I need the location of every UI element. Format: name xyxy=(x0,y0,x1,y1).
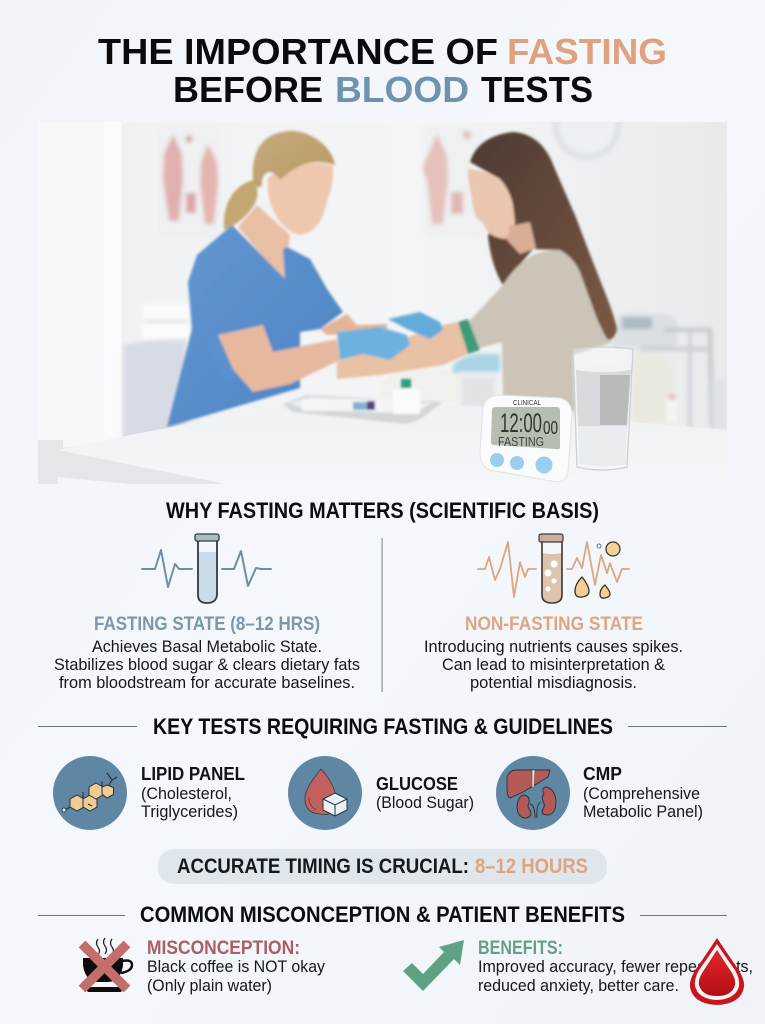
title: TESTS xyxy=(481,69,593,110)
panel: non-fasting state: Introducing nutrients causes spikes. xyxy=(424,637,683,656)
table xyxy=(58,422,727,484)
text: misconception: MISCONCEPTION: xyxy=(147,938,300,959)
text: benefits xyxy=(478,938,753,995)
timer xyxy=(480,395,572,482)
panel: non-fasting state: potential misdiagnosis. xyxy=(470,673,637,692)
panel: non-fasting state: Can lead to misinterpretation & xyxy=(442,655,666,674)
text: cmp xyxy=(583,764,703,821)
title xyxy=(98,31,667,110)
panel: fasting state xyxy=(54,614,360,692)
title: FASTING xyxy=(507,31,667,72)
text: misconception: Black coffee is NOT okay xyxy=(147,957,325,976)
icon: blood drop and sugar cube xyxy=(288,756,362,830)
text: cmp: CMP xyxy=(583,764,622,784)
icon: fasting test tube and steady pulse xyxy=(142,534,271,603)
photo: nurse drawing blood from patient with timer and water xyxy=(38,92,727,484)
title: THE IMPORTANCE OF xyxy=(98,31,498,72)
icon: lipid molecule xyxy=(53,756,127,830)
timer: FASTING xyxy=(498,434,544,449)
icon: red blood drop badge xyxy=(690,938,744,1005)
panel: fasting state: Achieves Basal Metabolic State. xyxy=(92,637,322,656)
nurse xyxy=(238,205,290,279)
panel: fasting state: from bloodstream for accurate baselines. xyxy=(59,673,355,692)
panel: fasting state: Stabilizes blood sugar & clears dietary fats xyxy=(54,655,360,674)
text: lipid panel: Triglycerides) xyxy=(141,802,238,821)
text: misconception xyxy=(147,938,325,995)
timer: CLINICAL xyxy=(513,400,541,407)
text: glucose: (Blood Sugar) xyxy=(376,793,474,812)
panel: non-fasting state: NON-FASTING STATE xyxy=(465,614,643,635)
timer: 00 xyxy=(543,418,558,438)
icon: check arrow xyxy=(403,940,464,991)
patient hair xyxy=(470,132,617,340)
glass of water xyxy=(573,347,633,470)
timer: 12:00 xyxy=(500,408,542,438)
icon: non-fasting test tube with spiking pulse and fats xyxy=(478,534,629,603)
title: BEFORE xyxy=(173,69,323,110)
callout: accurate timing: ACCURATE TIMING IS CRUCIAL: xyxy=(177,855,469,878)
text: misconception: (Only plain water) xyxy=(147,976,272,995)
icon: crossed-out coffee cup xyxy=(82,938,132,992)
text: cmp: Metabolic Panel) xyxy=(583,802,703,821)
text: benefits: reduced anxiety, better care. xyxy=(478,976,679,995)
heading: common misconception and benefits: COMMON MISCONCEPTION & PATIENT BENEFITS xyxy=(140,902,625,927)
text: lipid panel: (Cholesterol, xyxy=(141,784,232,803)
heading: key tests: KEY TESTS REQUIRING FASTING & GUIDELINES xyxy=(153,714,613,739)
title: BLOOD xyxy=(335,69,469,110)
panel: fasting state: FASTING STATE (8–12 HRS) xyxy=(94,614,320,635)
icon: liver and kidneys xyxy=(496,756,570,830)
text: cmp: (Comprehensive xyxy=(583,784,700,803)
text: benefits: Improved accuracy, fewer repeat tests, xyxy=(478,957,753,976)
callout: accurate timing: 8–12 HOURS xyxy=(475,855,588,878)
heading: why fasting matters: WHY FASTING MATTERS (SCIENTIFIC BASIS) xyxy=(166,498,599,523)
callout: accurate timing xyxy=(158,849,607,884)
text: glucose: GLUCOSE xyxy=(376,774,458,794)
text: lipid panel xyxy=(141,764,245,821)
text: glucose xyxy=(376,774,474,812)
divider xyxy=(382,538,383,692)
text: benefits: BENEFITS: xyxy=(478,938,563,959)
text: lipid panel: LIPID PANEL xyxy=(141,764,245,784)
panel: non-fasting state xyxy=(424,614,683,692)
